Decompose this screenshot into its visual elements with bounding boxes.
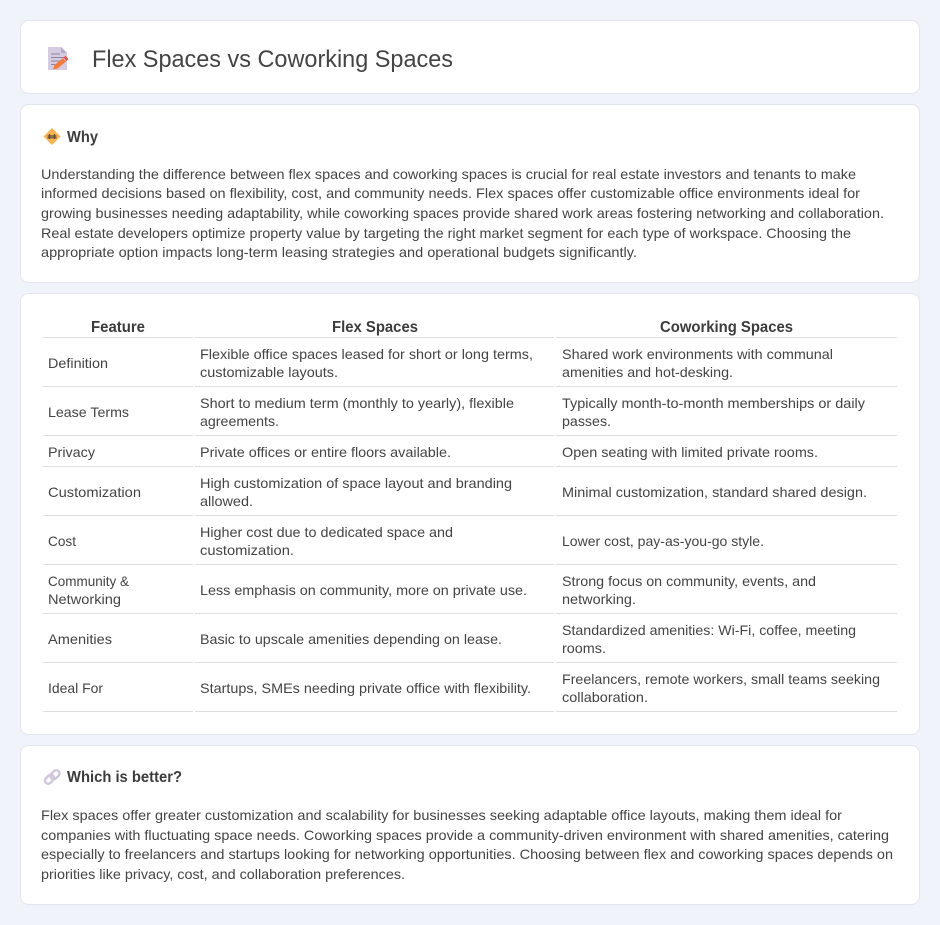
row: cost: Lower cost, pay-as-you-go style. <box>562 533 764 549</box>
text block: why paragraph: Real estate developers optimize property value by targeting the right market segment for each type of workspace. Choosing the <box>41 225 851 241</box>
text block: which is better paragraph: Flex spaces offer greater customization and scalability for businesses seeking adaptable office layouts, making them ideal for <box>41 807 842 823</box>
table header: Coworking Spaces <box>660 319 793 336</box>
text block: which is better paragraph: companies with fluctuating space needs. Coworking spaces provide a community-driven environment with shared amenities, catering <box>41 827 889 843</box>
row: customization: Minimal customization, standard shared design. <box>562 484 867 500</box>
row: definition: customizable layouts. <box>200 364 338 380</box>
panel: why <box>20 104 920 282</box>
heading: why: Why <box>67 129 98 146</box>
row: cost: Cost <box>48 533 76 549</box>
row: amenities <box>43 622 897 663</box>
panel: which is better <box>20 746 920 904</box>
text block: which is better paragraph <box>41 807 893 882</box>
row: definition: Shared work environments with communal <box>562 346 833 362</box>
table header: Flex Spaces <box>332 319 418 336</box>
text block: which is better paragraph: priorities like privacy, cost, and collaboration preferences. <box>41 866 405 882</box>
row: privacy <box>43 444 897 467</box>
panel: comparison table <box>20 294 920 734</box>
row: community and networking: Less emphasis on community, more on private use. <box>200 582 527 598</box>
title: Flex Spaces vs Coworking Spaces <box>92 46 453 73</box>
row: cost: customization. <box>200 542 294 558</box>
row: definition: Flexible office spaces leased for short or long terms, <box>200 346 533 362</box>
heading: which is better: Which is better? <box>67 769 182 786</box>
row: ideal for <box>43 671 897 712</box>
table header: Feature <box>91 319 145 336</box>
row: lease terms <box>43 395 897 436</box>
row: customization: Customization <box>48 484 141 500</box>
row: amenities: Amenities <box>48 631 112 647</box>
row: privacy: Private offices or entire floors available. <box>200 444 451 460</box>
text block: why paragraph: appropriate option impacts long-term leasing strategies and operational budgets significantly. <box>41 244 637 260</box>
row: definition <box>43 346 897 387</box>
row: lease terms: Typically month-to-month memberships or daily <box>562 395 865 411</box>
row: ideal for: Startups, SMEs needing private office with flexibility. <box>200 680 531 696</box>
icon: chain link <box>44 769 61 785</box>
row: definition: amenities and hot-desking. <box>562 364 733 380</box>
text block: which is better paragraph: especially to freelancers and startups looking for networking opportunities. Choosing between flex and coworking spaces depends on <box>41 846 893 862</box>
text block: why paragraph: growing businesses needing adaptability, while coworking spaces provide shared work areas fostering networking and collaboration. <box>41 205 884 221</box>
table header <box>43 319 897 338</box>
row: customization: High customization of space layout and branding <box>200 475 512 491</box>
row: amenities: Basic to upscale amenities depending on lease. <box>200 631 502 647</box>
icon: memo with pencil <box>48 47 68 70</box>
row: amenities: rooms. <box>562 640 606 656</box>
row: customization <box>43 475 897 516</box>
row: definition: Definition <box>48 355 108 371</box>
row: lease terms: passes. <box>562 413 611 429</box>
row: community and networking: Strong focus on community, events, and <box>562 573 816 589</box>
icon: construction diamond <box>44 128 60 145</box>
row: lease terms: Short to medium term (monthly to yearly), flexible <box>200 395 514 411</box>
row: privacy: Privacy <box>48 444 95 460</box>
panel: title card <box>20 20 920 94</box>
row: cost: Higher cost due to dedicated space and <box>200 524 453 540</box>
text block: why paragraph: Understanding the difference between flex spaces and coworking spaces is crucial for real estate investors and tenants to make <box>41 166 856 182</box>
row: privacy: Open seating with limited private rooms. <box>562 444 818 460</box>
text block: why paragraph <box>41 166 884 260</box>
row: cost <box>43 524 897 565</box>
row: community and networking: Community & <box>48 573 130 589</box>
row: community and networking: Networking <box>48 591 121 607</box>
row: lease terms: agreements. <box>200 413 279 429</box>
row: ideal for: Ideal For <box>48 680 103 696</box>
row: lease terms: Lease Terms <box>48 404 129 420</box>
row: community and networking: networking. <box>562 591 636 607</box>
row: customization: allowed. <box>200 493 253 509</box>
row: amenities: Standardized amenities: Wi-Fi, coffee, meeting <box>562 622 856 638</box>
text block: why paragraph: informed decisions based on flexibility, cost, and community needs. Flex spaces offer customizable office environments ideal for <box>41 185 860 201</box>
row: community and networking <box>43 573 897 614</box>
row: ideal for: Freelancers, remote workers, small teams seeking <box>562 671 880 687</box>
row: ideal for: collaboration. <box>562 689 648 705</box>
